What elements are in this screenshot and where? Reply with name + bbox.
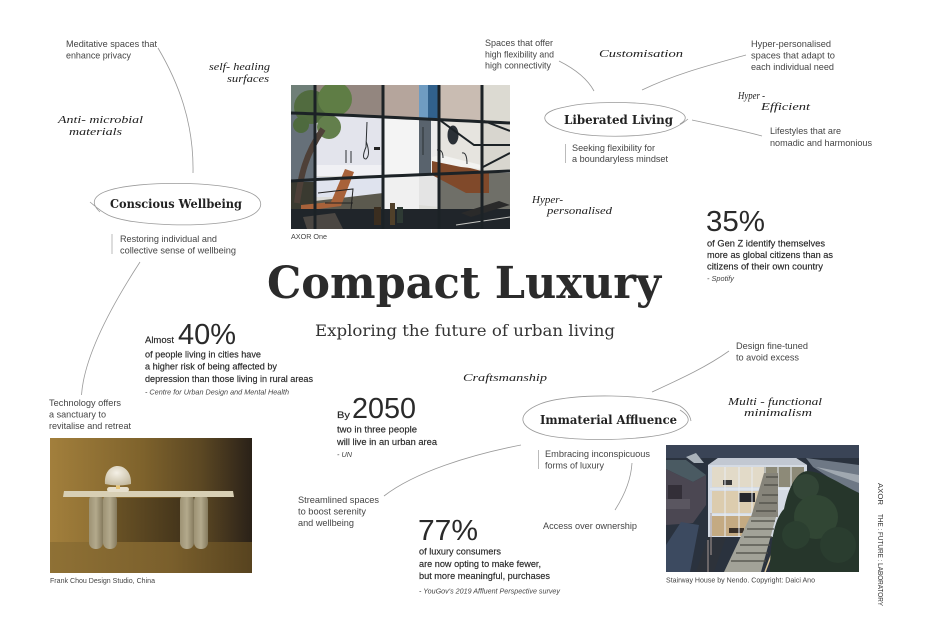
stat: 77 percent: 77% xyxy=(418,515,478,547)
handwritten: multi-functional minimalism: Multi - functional xyxy=(727,397,822,408)
handwritten: hyper-efficient: Efficient xyxy=(760,102,810,113)
panel: liberated living xyxy=(485,37,872,164)
stat: 35 percent: 35% xyxy=(706,206,765,238)
stat: 2050: 2050 xyxy=(352,393,416,425)
arrow: technology connector xyxy=(82,262,140,395)
subtitle: Exploring the future of urban living xyxy=(315,321,615,340)
handwritten: hyper-efficient: Hyper - xyxy=(737,91,765,102)
stat: 77 percent: are now opting to make fewer, xyxy=(419,558,541,569)
note: streamlined spaces: and wellbeing xyxy=(298,517,354,528)
arrow: access connector xyxy=(615,463,632,510)
stat: 40 percent: a higher risk of being affected by xyxy=(145,360,277,372)
note: streamlined spaces xyxy=(298,494,379,528)
description: seeking flexibility: Seeking flexibility for xyxy=(572,142,655,153)
note: streamlined spaces: to boost serenity xyxy=(298,506,366,516)
handwritten: anti-microbial materials: materials xyxy=(69,127,122,138)
ellipse heading: liberated living: Liberated Living xyxy=(564,112,673,127)
stat: 2050: two in three people xyxy=(337,424,417,434)
photo: AXOR One bathroom xyxy=(291,85,510,229)
stat: 35 percent: - Spotify xyxy=(707,276,735,283)
caption: Stairway House: Stairway House by Nendo. Copyright: Daici Ano xyxy=(666,576,815,584)
ellipse heading: conscious wellbeing: Conscious Wellbeing xyxy=(110,196,242,211)
handwritten: self-healing surfaces: surfaces xyxy=(227,74,269,85)
stat: 40 percent: 40% xyxy=(178,319,236,351)
stat: 2050: - UN xyxy=(337,452,353,459)
note: streamlined spaces: Streamlined spaces xyxy=(298,494,379,505)
note: spaces that offer flexibility: Spaces that offer xyxy=(485,37,553,48)
ellipse heading: liberated living xyxy=(545,102,688,136)
stat: 40 percent: Almost xyxy=(145,334,174,345)
description: seeking flexibility: a boundaryless mindset xyxy=(572,153,668,164)
stat: 40 percent: - Centre for Urban Design and Mental Health xyxy=(145,390,289,396)
stat: 35 percent: citizens of their own country xyxy=(707,260,823,272)
description: restoring wellbeing xyxy=(112,233,236,256)
note: spaces that offer flexibility: high connectivity xyxy=(485,60,551,70)
description: restoring wellbeing: collective sense of wellbeing xyxy=(120,244,236,256)
handwritten: customisation: Customisation xyxy=(599,49,683,60)
stat: 35 percent: of Gen Z identify themselves xyxy=(707,238,825,248)
caption: Frank Chou: Frank Chou Design Studio, China xyxy=(50,576,155,585)
note: hyper-personalised spaces: Hyper-personalised xyxy=(751,38,831,49)
brand: The Future Laboratory vertical mark: THE : FUTURE : LABORATORY xyxy=(876,514,885,606)
arrow: lifestyles connector xyxy=(692,120,762,136)
note: meditative spaces: enhance privacy xyxy=(66,50,131,60)
note: technology sanctuary: a sanctuary to xyxy=(49,408,106,420)
stat: 2050: will live in an urban area xyxy=(336,436,438,447)
note: nomadic lifestyles xyxy=(770,125,872,148)
stat: 2050 xyxy=(336,393,438,459)
description: embracing inconspicuous: Embracing inconspicuous xyxy=(545,448,650,459)
handwritten: multi-functional minimalism xyxy=(727,397,822,419)
stat: 77 percent: of luxury consumers xyxy=(419,546,501,556)
panel: immaterial affluence xyxy=(298,340,808,531)
stat: 77 percent: - YouGov's 2019 Affluent Perspective survey xyxy=(419,588,561,596)
note: hyper-personalised spaces: spaces that adapt to xyxy=(751,50,835,60)
note: meditative spaces xyxy=(66,38,157,60)
stat: 35 percent xyxy=(706,206,833,283)
ellipse heading: conscious wellbeing xyxy=(90,183,261,225)
handwritten: hyper-personalised xyxy=(531,195,613,217)
title: Compact Luxury xyxy=(267,258,662,309)
ellipse heading: immaterial affluence xyxy=(523,396,691,440)
arrow: streamlined connector xyxy=(384,445,521,496)
stat: 77 percent xyxy=(418,515,561,596)
handwritten: hyper-personalised: personalised xyxy=(546,206,613,217)
handwritten: craftsmanship: Craftsmanship xyxy=(463,373,547,384)
note: spaces that offer flexibility: high flexibility and xyxy=(485,48,554,60)
arrow: meditative spaces connector xyxy=(158,48,193,173)
arrow: hyper-personalised connector xyxy=(642,55,746,90)
brand: AXOR vertical mark: AXOR xyxy=(876,483,885,506)
note: hyper-personalised spaces: each individual need xyxy=(751,61,834,72)
caption: AXOR One: AXOR One xyxy=(291,232,327,241)
note: meditative spaces: Meditative spaces that xyxy=(66,38,157,49)
handwritten: multi-functional minimalism: minimalism xyxy=(744,408,812,419)
note: spaces that offer flexibility xyxy=(485,37,554,70)
stat: 2050: By xyxy=(337,409,350,420)
stat: 40 percent: depression than those living in rural areas xyxy=(145,373,313,384)
note: hyper-personalised spaces xyxy=(751,38,835,72)
description: restoring wellbeing: Restoring individual and xyxy=(120,233,217,244)
stat: 40 percent xyxy=(145,319,313,396)
handwritten: anti-microbial materials: Anti- microbial xyxy=(57,115,143,126)
stat: 77 percent: but more meaningful, purchases xyxy=(419,570,550,581)
note: technology sanctuary: Technology offers xyxy=(49,397,121,408)
arrow: design connector xyxy=(652,351,729,392)
arrow: flexibility connector xyxy=(559,61,594,91)
note: design fine-tuned: to avoid excess xyxy=(736,352,799,362)
description: embracing inconspicuous: forms of luxury xyxy=(545,460,604,470)
photo: Frank Chou table xyxy=(50,438,252,573)
handwritten: self-healing surfaces xyxy=(209,62,270,85)
note: technology sanctuary xyxy=(49,397,131,431)
stat: 35 percent: more as global citizens than as xyxy=(707,249,833,260)
panel: conscious wellbeing xyxy=(49,38,261,431)
note: nomadic lifestyles: Lifestyles that are xyxy=(770,125,841,136)
note: access over ownership: Access over ownership xyxy=(543,520,637,531)
description: seeking flexibility xyxy=(566,142,668,164)
note: technology sanctuary: revitalise and retreat xyxy=(49,420,131,431)
photo: Stairway House xyxy=(666,445,859,572)
handwritten: anti-microbial materials xyxy=(57,115,143,138)
ellipse heading: immaterial affluence: Immaterial Affluence xyxy=(540,412,677,427)
handwritten: hyper-efficient xyxy=(737,91,810,113)
note: design fine-tuned: Design fine-tuned xyxy=(736,340,808,351)
handwritten: self-healing surfaces: self- healing xyxy=(209,62,270,73)
handwritten: hyper-personalised: Hyper- xyxy=(531,195,563,206)
note: design fine-tuned xyxy=(736,340,808,362)
description: embracing inconspicuous xyxy=(538,448,650,470)
stat: 40 percent: of people living in cities have xyxy=(145,348,261,360)
note: nomadic lifestyles: nomadic and harmonious xyxy=(770,137,872,148)
